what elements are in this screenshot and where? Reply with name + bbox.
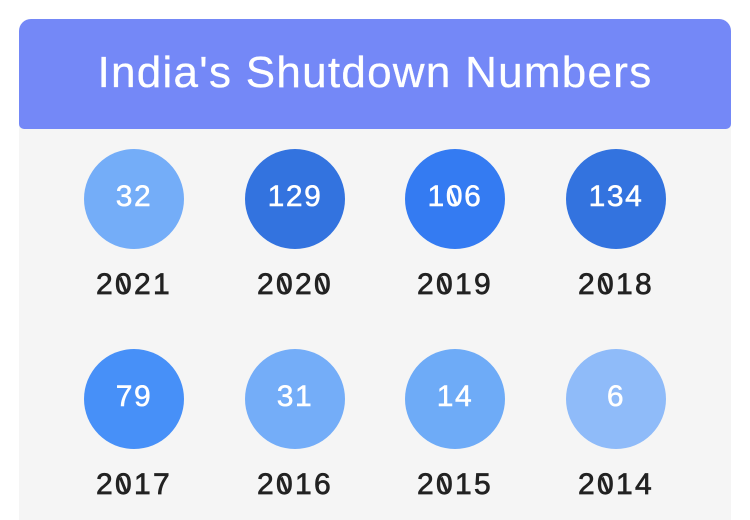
year: 2016: 2 16 xyxy=(257,468,333,501)
circle: 106 xyxy=(405,149,505,249)
year: 2020: 0 xyxy=(314,268,333,301)
year: 2021: 0 xyxy=(115,268,134,301)
year: 2017: 2 17 xyxy=(96,468,172,501)
circle: 6 xyxy=(566,349,666,449)
circle: 134: 134 xyxy=(589,180,643,213)
year: 2016: 0 xyxy=(276,468,295,501)
stat: 2017 xyxy=(84,349,184,501)
circle: 32 xyxy=(84,149,184,249)
circle: 32: 32 xyxy=(116,180,152,213)
year: 2019: 0 xyxy=(436,268,455,301)
year: 2017: 0 xyxy=(115,468,134,501)
year: 2018: 0 xyxy=(597,268,616,301)
circle: 14: 14 xyxy=(437,380,473,413)
circle: 106: 1 6 xyxy=(428,180,482,213)
year: 2021: 2 21 xyxy=(96,268,172,301)
stat: 2015 xyxy=(405,349,505,501)
stat: 2021 xyxy=(84,149,184,301)
stat: 2020 xyxy=(245,149,345,301)
year: 2020: 2 2 xyxy=(257,268,314,301)
year: 2020: 0 xyxy=(276,268,295,301)
title: India's Shutdown Numbers xyxy=(98,48,652,97)
year: 2014: 2 14 xyxy=(578,468,654,501)
stat: 2016 xyxy=(245,349,345,501)
circle: 129: 129 xyxy=(268,180,322,213)
circle: 134 xyxy=(566,149,666,249)
stat: 2014 xyxy=(566,349,666,501)
header banner xyxy=(19,19,731,129)
circle: 106: 0 xyxy=(446,180,464,213)
circle: 6: 6 xyxy=(607,380,625,413)
stat: 2018 xyxy=(566,149,666,301)
year: 2015: 0 xyxy=(436,468,455,501)
year: 2018: 2 18 xyxy=(578,268,654,301)
circle: 14 xyxy=(405,349,505,449)
circle: 31: 31 xyxy=(277,380,313,413)
circle: 31 xyxy=(245,349,345,449)
year: 2019: 2 19 xyxy=(417,268,493,301)
circle: 129 xyxy=(245,149,345,249)
year: 2015: 2 15 xyxy=(417,468,493,501)
stat: 2019 xyxy=(405,149,505,301)
circle: 79: 79 xyxy=(116,380,152,413)
circle: 79 xyxy=(84,349,184,449)
year: 2014: 0 xyxy=(597,468,616,501)
